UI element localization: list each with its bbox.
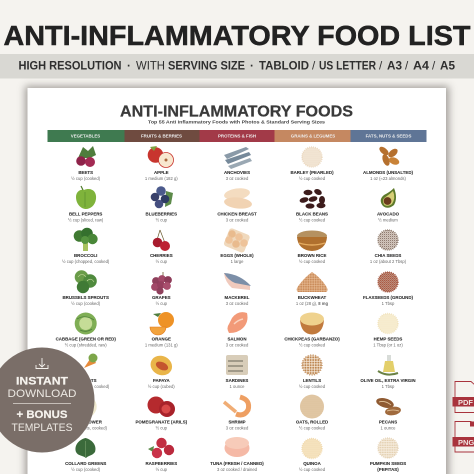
food: papaya [147, 352, 175, 389]
food: collard greens [65, 438, 106, 472]
poster subtitle: Top 55 Anti Inflammatory Foods with Photos & Standard Serving Sizes [148, 120, 326, 124]
food: cauliflower: ½ cup (florets, cooked) [64, 426, 108, 431]
banner: formats and features [0, 54, 474, 78]
food: orange [145, 312, 178, 347]
food: olive oil [360, 355, 416, 389]
food: broccoli: ½ cup (chopped, cooked) [62, 259, 110, 264]
food: avocado: ½ medium [378, 218, 398, 223]
food: cabbage: CABBAGE (GREEN OR RED) [56, 336, 116, 341]
banner: formats and features: A3 [387, 60, 403, 72]
food: collard greens: COLLARD GREENS [65, 461, 106, 466]
food: flaxseeds: 1 Tbsp [382, 301, 395, 306]
poster shadow [25, 86, 449, 474]
food: pecans: PECANS [379, 420, 397, 425]
icon: png file [452, 422, 474, 452]
food: pomegranate: POMEGRANATE (ARILS) [135, 420, 188, 425]
food: raspberries: ½ cup [156, 467, 168, 472]
food: tuna: TUNA (FRESH / CANNED) [210, 461, 264, 466]
food: hemp seeds: HEMP SEEDS [374, 336, 402, 341]
poster heading: ANTI-INFLAMMATORY FOODS [120, 104, 353, 120]
food: carrots: ½ cup (chopped, cooked) [62, 384, 110, 389]
category header bar [48, 130, 426, 142]
food: pumpkin seeds [370, 438, 406, 472]
food: mackerel [224, 273, 251, 306]
food: raspberries [145, 438, 177, 472]
food: salmon: 3 oz cooked [226, 342, 249, 347]
banner: formats and features: · [250, 60, 254, 72]
food: quinoa: ½ cup cooked [299, 467, 326, 472]
food: pumpkin seeds: PUMPKIN SEEDS [370, 461, 406, 466]
icon: png file: PNG [458, 438, 474, 447]
food: barley: ½ cup cooked [299, 176, 326, 181]
food: collard greens: ½ cup (cooked) [71, 467, 101, 472]
food: quinoa: QUINOA [303, 461, 322, 466]
food: sardines: SARDINES [226, 378, 248, 383]
food: chia seeds [370, 230, 407, 264]
banner: formats and features: A4 [413, 60, 430, 72]
food: sardines [226, 355, 248, 389]
food: beets: BEETS [78, 170, 93, 175]
food: shrimp [224, 397, 249, 431]
banner: formats and features: SERVING SIZE [168, 60, 245, 72]
food: barley [290, 147, 334, 181]
food: black beans: ½ cup cooked [299, 218, 326, 223]
banner: formats and features: A5 [440, 60, 456, 72]
banner: formats and features: / [405, 60, 409, 72]
food: raspberries: RASPBERRIES [145, 461, 177, 466]
food: mackerel: MACKEREL [225, 295, 250, 300]
food: brown rice bowl: BROWN RICE [298, 253, 326, 258]
food: carrots [62, 354, 110, 389]
food: orange: ORANGE [152, 336, 171, 341]
category header bar: VEGETABLES [71, 134, 100, 139]
food: pecans: 1 ounce [381, 426, 396, 431]
food: cauliflower: CAULIFLOWER [69, 420, 103, 425]
badge: instant download and bonus templates: INSTANT [16, 376, 68, 388]
banner: formats and features: / [312, 60, 316, 72]
food: apple: 1 medium (182 g) [145, 176, 178, 181]
icon: pdf file: PDF [458, 398, 473, 407]
food: buckwheat [296, 272, 329, 306]
food: broccoli: BROCCOLI [74, 253, 97, 258]
food: black beans [296, 188, 328, 223]
food: grapes: GRAPES [152, 295, 171, 300]
food: anchovies: ANCHOVIES [224, 170, 250, 175]
badge: instant download and bonus templates [0, 348, 94, 452]
food: papaya: PAPAYA [153, 378, 171, 383]
column: grains and legumes [284, 147, 340, 472]
food: quinoa [299, 438, 326, 472]
food: beets [71, 146, 101, 181]
food: cherries [150, 230, 173, 264]
food: barley: BARLEY (PEARLED) [290, 170, 334, 175]
column: proteins and fish [210, 147, 264, 472]
column: fats, nuts and seeds [360, 145, 416, 472]
food: pecans [375, 396, 402, 431]
food: pomegranate [135, 396, 188, 431]
food: hemp seeds: 1 Tbsp (or 1 oz) [373, 342, 403, 347]
banner: formats and features: · [127, 60, 131, 72]
food: tuna [210, 437, 264, 472]
food: oats: OATS, ROLLED [296, 420, 328, 425]
icon: download [36, 358, 48, 368]
food: beets: ½ cup (cooked) [71, 176, 101, 181]
banner: formats and features: / [379, 60, 383, 72]
food: carrots: CARROTS [75, 378, 97, 383]
food: chickpeas: CHICKPEAS (GARBANZO) [284, 336, 340, 341]
food: salmon: SALMON [227, 336, 247, 341]
food: chicken breast: CHICKEN BREAST [217, 212, 257, 217]
badge: instant download and bonus templates: TEMPLATES [12, 422, 72, 434]
food: brown rice bowl [297, 230, 327, 264]
food: orange: 1 medium (131 g) [145, 342, 178, 347]
food: avocado: AVOCADO [377, 212, 400, 217]
food: flaxseeds: FLAXSEEDS (GROUND) [363, 295, 414, 300]
food: lentils [299, 355, 326, 389]
food: almonds [363, 145, 413, 181]
food: pumpkin seeds: (PEPITAS) [377, 467, 399, 472]
column: vegetables [56, 146, 116, 472]
food: black beans: BLACK BEANS [296, 212, 328, 217]
food: olive oil: 1 Tbsp [382, 384, 395, 389]
food: almonds: 1 oz (≈23 almonds) [370, 176, 407, 181]
banner: formats and features: WITH [136, 60, 165, 72]
food: blueberries [146, 186, 177, 223]
food: chicken breast: 3 oz cooked [226, 218, 249, 223]
banner: formats and features: US LETTER [319, 60, 377, 72]
food: cherries: CHERRIES [150, 253, 173, 258]
food: sardines: 1 ounce [230, 384, 245, 389]
category header bar: FATS, NUTS & SEEDS [366, 134, 411, 139]
food: cauliflower [64, 396, 108, 431]
panel: poster sheet [28, 88, 446, 474]
badge: instant download and bonus templates: DOWNLOAD [8, 388, 77, 400]
food: eggs [220, 228, 254, 264]
food: broccoli [62, 228, 110, 264]
food: shrimp: 3 oz cooked [226, 426, 249, 431]
food: chickpeas: ½ cup cooked [299, 342, 326, 347]
food: oats [296, 395, 328, 431]
column: fruits and berries [135, 146, 188, 472]
food: cabbage [56, 312, 116, 347]
food: anchovies [224, 147, 252, 181]
badge: instant download and bonus templates: + BONUS [16, 409, 68, 421]
category header bar: FRUITS & BERRIES [141, 134, 182, 139]
food: apple: APPLE [154, 170, 169, 175]
banner: formats and features: TABLOID [259, 60, 309, 72]
food: bell peppers: BELL PEPPERS [69, 212, 102, 217]
category header bar: GRAINS & LEGUMES [291, 134, 335, 139]
food: chickpeas [284, 312, 340, 347]
food: hemp seeds [373, 314, 403, 347]
food: cherries: ½ cup [156, 259, 168, 264]
food: grapes: ½ cup [156, 301, 168, 306]
food: almonds: ALMONDS (UNSALTED) [363, 170, 413, 175]
food: chicken breast [217, 187, 257, 223]
food: blueberries: BLUEBERRIES [146, 212, 177, 217]
food: mackerel: 3 oz cooked [226, 301, 249, 306]
food: chia seeds: 1 oz (about 2 Tbsp) [370, 259, 407, 264]
food: pomegranate: ½ cup [156, 426, 168, 431]
food: brussels sprouts [63, 270, 109, 306]
food: brussels sprouts: BRUSSELS SPROUTS [63, 295, 109, 300]
food: bell peppers: ½ cup (sliced, raw) [68, 218, 104, 223]
title: ANTI-INFLAMMATORY FOOD LIST [4, 20, 471, 51]
food: oats: ½ cup cooked [299, 426, 326, 431]
banner: formats and features: HIGH RESOLUTION [18, 60, 122, 72]
category header bar: PROTEINS & FISH [218, 134, 256, 139]
food: apple [145, 146, 178, 181]
food: lentils: LENTILS [303, 378, 321, 383]
food: lentils: ½ cup cooked [299, 384, 326, 389]
food: bell peppers [68, 186, 104, 223]
food: chia seeds: CHIA SEEDS [375, 253, 401, 258]
food: papaya: ½ cup (cubed) [148, 384, 175, 389]
food: flaxseeds [363, 272, 414, 306]
food: brown rice bowl: ½ cup cooked [299, 259, 326, 264]
food: brussels sprouts: ½ cup (cooked) [71, 301, 101, 306]
food: buckwheat: BUCKWHEAT [298, 295, 327, 300]
food: shrimp: SHRIMP [228, 420, 246, 425]
food: olive oil: OLIVE OIL, EXTRA VIRGIN [360, 378, 416, 383]
banner: formats and features: / [432, 60, 436, 72]
food: buckwheat: 1 oz (28 g), 8 mg [296, 301, 329, 306]
food: eggs: 1 large [231, 259, 244, 264]
icon: pdf file [452, 382, 474, 412]
food: grapes [151, 272, 172, 306]
food: anchovies: 3 oz cooked [226, 176, 249, 181]
food: blueberries: ½ cup [156, 218, 168, 223]
food: cabbage: ½ cup (shredded, raw) [65, 342, 107, 347]
food: tuna: 3 oz cooked / drained [217, 467, 258, 472]
food: avocado [377, 188, 400, 223]
food: salmon [226, 312, 249, 347]
food: eggs: EGGS (WHOLE) [220, 253, 254, 258]
